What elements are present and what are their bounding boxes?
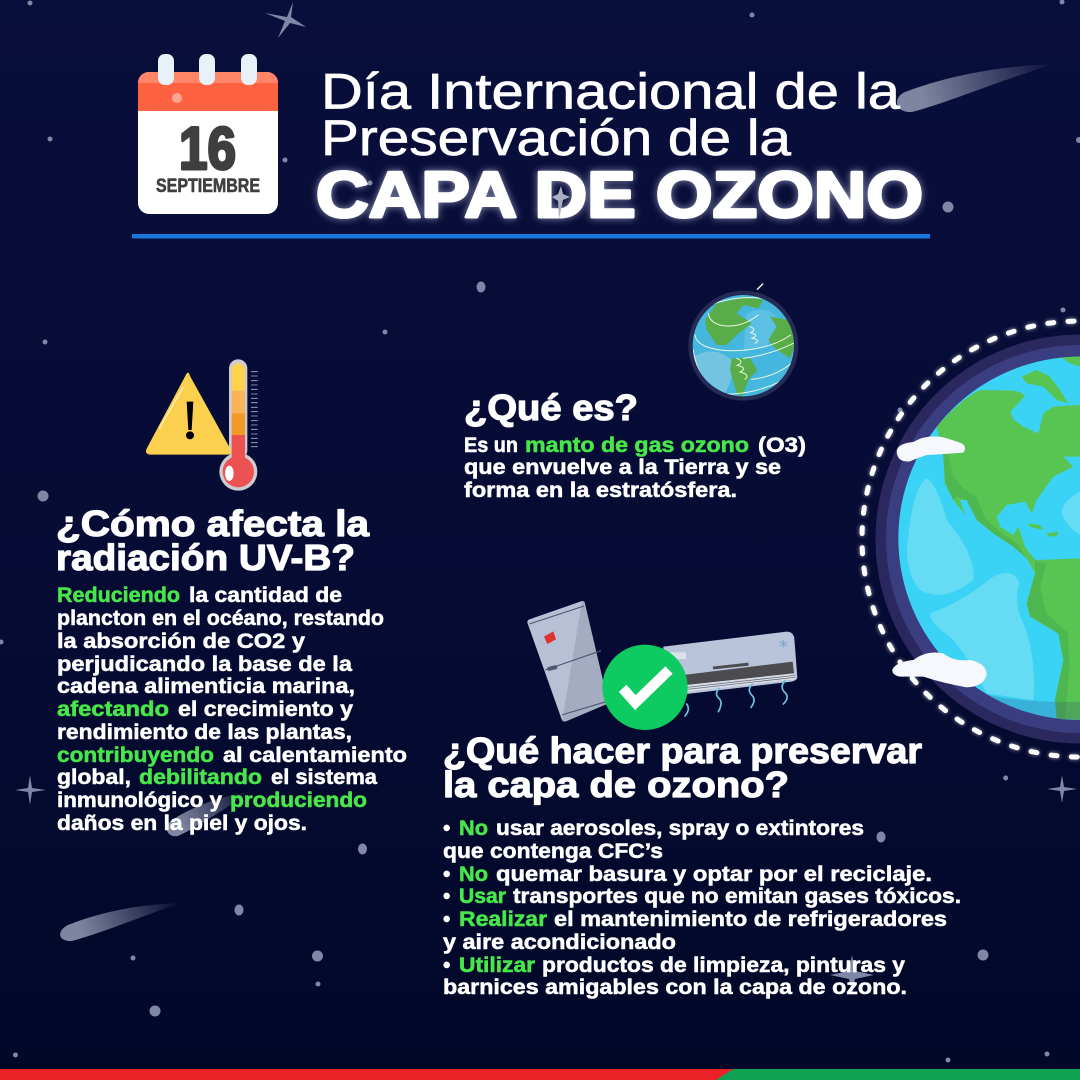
section: ¿Qué hacer para preservar la capa de ozono?: quemar basura y optar por el reciclaje.: [496, 863, 932, 886]
section: ¿Qué hacer para preservar la capa de ozono?: •: [443, 954, 450, 977]
section: ¿Qué hacer para preservar la capa de ozono?: No: [459, 863, 488, 886]
section: ¿Qué es?: manto de gas ozono: [525, 434, 749, 457]
section: ¿Qué hacer para preservar la capa de ozono?: ¿Qué hacer para preservar: [443, 730, 922, 771]
section: ¿Qué es?: (O3): [758, 434, 806, 457]
section: ¿Cómo afecta la radiación UV-B?: plancton en el océano, restando: [57, 607, 384, 630]
section: ¿Qué es?: ¿Qué es?: [464, 387, 638, 428]
section: ¿Qué hacer para preservar la capa de ozono?: barnices amigables con la capa de ozono.: [443, 976, 907, 999]
big earth with ozone ring: [862, 321, 1080, 757]
section: ¿Cómo afecta la radiación UV-B?: inmunológico y: [57, 789, 222, 812]
section: ¿Qué hacer para preservar la capa de ozono?: •: [443, 908, 450, 931]
section: ¿Cómo afecta la radiación UV-B?: el sistema: [271, 766, 377, 789]
section: ¿Qué es?: Es un: [464, 434, 518, 457]
section: ¿Qué hacer para preservar la capa de ozono?: Usar: [459, 885, 506, 908]
check badge: [602, 645, 688, 730]
calendar icon: SEPTIEMBRE: [156, 176, 260, 197]
section: ¿Cómo afecta la radiación UV-B?: daños en la piel y ojos.: [57, 812, 307, 835]
section: ¿Qué hacer para preservar la capa de ozono?: que contenga CFC’s: [443, 840, 663, 863]
section: ¿Cómo afecta la radiación UV-B?: ¿Cómo afecta la: [56, 503, 370, 544]
section: ¿Cómo afecta la radiación UV-B?: el crecimiento y: [178, 698, 353, 721]
title underline: [132, 234, 930, 238]
section: ¿Qué hacer para preservar la capa de ozono?: [443, 730, 961, 999]
section: ¿Cómo afecta la radiación UV-B?: cadena alimenticia marina,: [57, 675, 355, 698]
small globe icon: [688, 284, 798, 401]
section: ¿Cómo afecta la radiación UV-B?: debilitando: [139, 766, 262, 789]
section: ¿Qué es?: forma en la estratósfera.: [464, 479, 737, 502]
section: ¿Qué hacer para preservar la capa de ozono?: •: [443, 863, 450, 886]
section: ¿Qué hacer para preservar la capa de ozono?: •: [443, 885, 450, 908]
fridge: [527, 601, 608, 721]
section: ¿Cómo afecta la radiación UV-B?: radiación UV-B?: [56, 537, 355, 578]
calendar icon: 16: [179, 115, 236, 182]
section: ¿Cómo afecta la radiación UV-B?: [56, 503, 407, 835]
air conditioner: [663, 632, 797, 716]
section: ¿Qué hacer para preservar la capa de ozono?: Utilizar: [459, 954, 535, 977]
section: ¿Qué hacer para preservar la capa de ozono?: productos de limpieza, pinturas y: [542, 954, 905, 977]
section: ¿Qué es?: [464, 387, 806, 502]
section: ¿Qué hacer para preservar la capa de ozono?: Realizar: [459, 908, 547, 931]
warning and thermometer icon: [146, 359, 258, 491]
section: ¿Qué hacer para preservar la capa de ozono?: usar aerosoles, spray o extintores: [496, 817, 864, 840]
section: ¿Cómo afecta la radiación UV-B?: perjudicando la base de la: [57, 653, 352, 676]
section: ¿Cómo afecta la radiación UV-B?: la cantidad de: [189, 584, 342, 607]
section: ¿Qué hacer para preservar la capa de ozono?: No: [459, 817, 488, 840]
section: ¿Cómo afecta la radiación UV-B?: la absorción de CO2 y: [57, 630, 305, 653]
section: ¿Qué hacer para preservar la capa de ozono?: transportes que no emitan gases tóxicos.: [513, 885, 961, 908]
section: ¿Cómo afecta la radiación UV-B?: contribuyendo: [57, 744, 214, 767]
cloud: upper: [897, 436, 965, 461]
section: ¿Cómo afecta la radiación UV-B?: Reduciendo: [57, 584, 180, 607]
section: ¿Cómo afecta la radiación UV-B?: produciendo: [230, 789, 367, 812]
section: ¿Qué hacer para preservar la capa de ozono?: la capa de ozono?: [443, 764, 789, 805]
calendar icon: [138, 54, 278, 214]
comet: lower left: [60, 903, 181, 941]
cloud: lower: [892, 652, 987, 687]
section: ¿Cómo afecta la radiación UV-B?: global,: [57, 766, 131, 789]
star over title: [552, 186, 570, 219]
comet: behind left text: [167, 792, 251, 836]
section: ¿Qué hacer para preservar la capa de ozono?: •: [443, 817, 450, 840]
section: ¿Qué hacer para preservar la capa de ozono?: el mantenimiento de refrigeradores: [554, 908, 947, 931]
section: ¿Qué es?: que envuelve a la Tierra y se: [464, 456, 781, 479]
title: Día Internacional de la: [321, 64, 900, 120]
section: ¿Cómo afecta la radiación UV-B?: al calentamiento: [223, 744, 407, 767]
title: Preservación de la: [321, 110, 791, 166]
section: ¿Cómo afecta la radiación UV-B?: rendimiento de las plantas,: [57, 721, 352, 744]
section: ¿Qué hacer para preservar la capa de ozono?: y aire acondicionado: [443, 931, 676, 954]
comet: top right: [897, 64, 1055, 112]
title: CAPA DE OZONO: [316, 158, 923, 231]
bottom colour bar: [0, 1069, 1080, 1080]
section: ¿Cómo afecta la radiación UV-B?: afectando: [57, 698, 169, 721]
fridge, air conditioner and check icon: [527, 601, 797, 730]
title: [316, 64, 923, 231]
